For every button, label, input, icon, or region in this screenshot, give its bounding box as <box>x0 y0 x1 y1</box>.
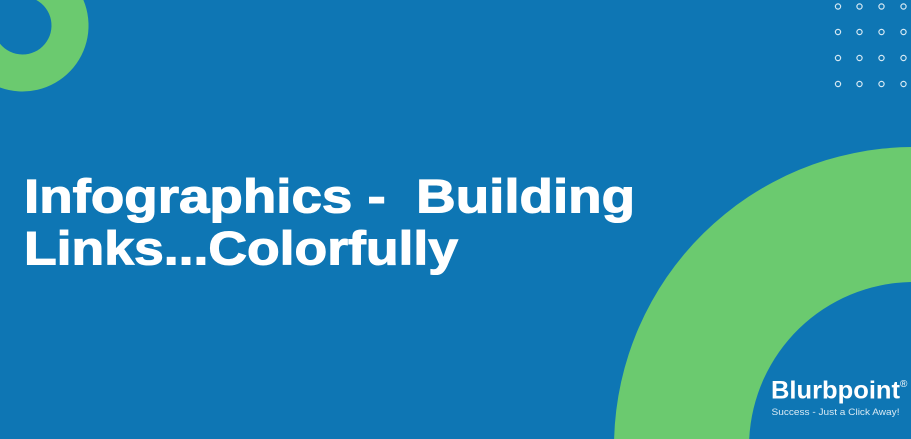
title: Links...Colorfully <box>24 222 459 276</box>
logo: Blurbpoint: Blurbpoint <box>771 376 901 404</box>
icon: bottom-right green arc <box>614 147 911 439</box>
icon: top-left green ring <box>0 0 89 92</box>
title: Infographics - Building <box>24 170 635 224</box>
title <box>24 170 635 276</box>
logo: Blurbpoint <box>771 376 908 417</box>
logo: Blurbpoint: Success - Just a Click Away! <box>772 406 900 417</box>
dot grid <box>835 4 906 87</box>
logo: Blurbpoint: ® <box>900 379 908 390</box>
